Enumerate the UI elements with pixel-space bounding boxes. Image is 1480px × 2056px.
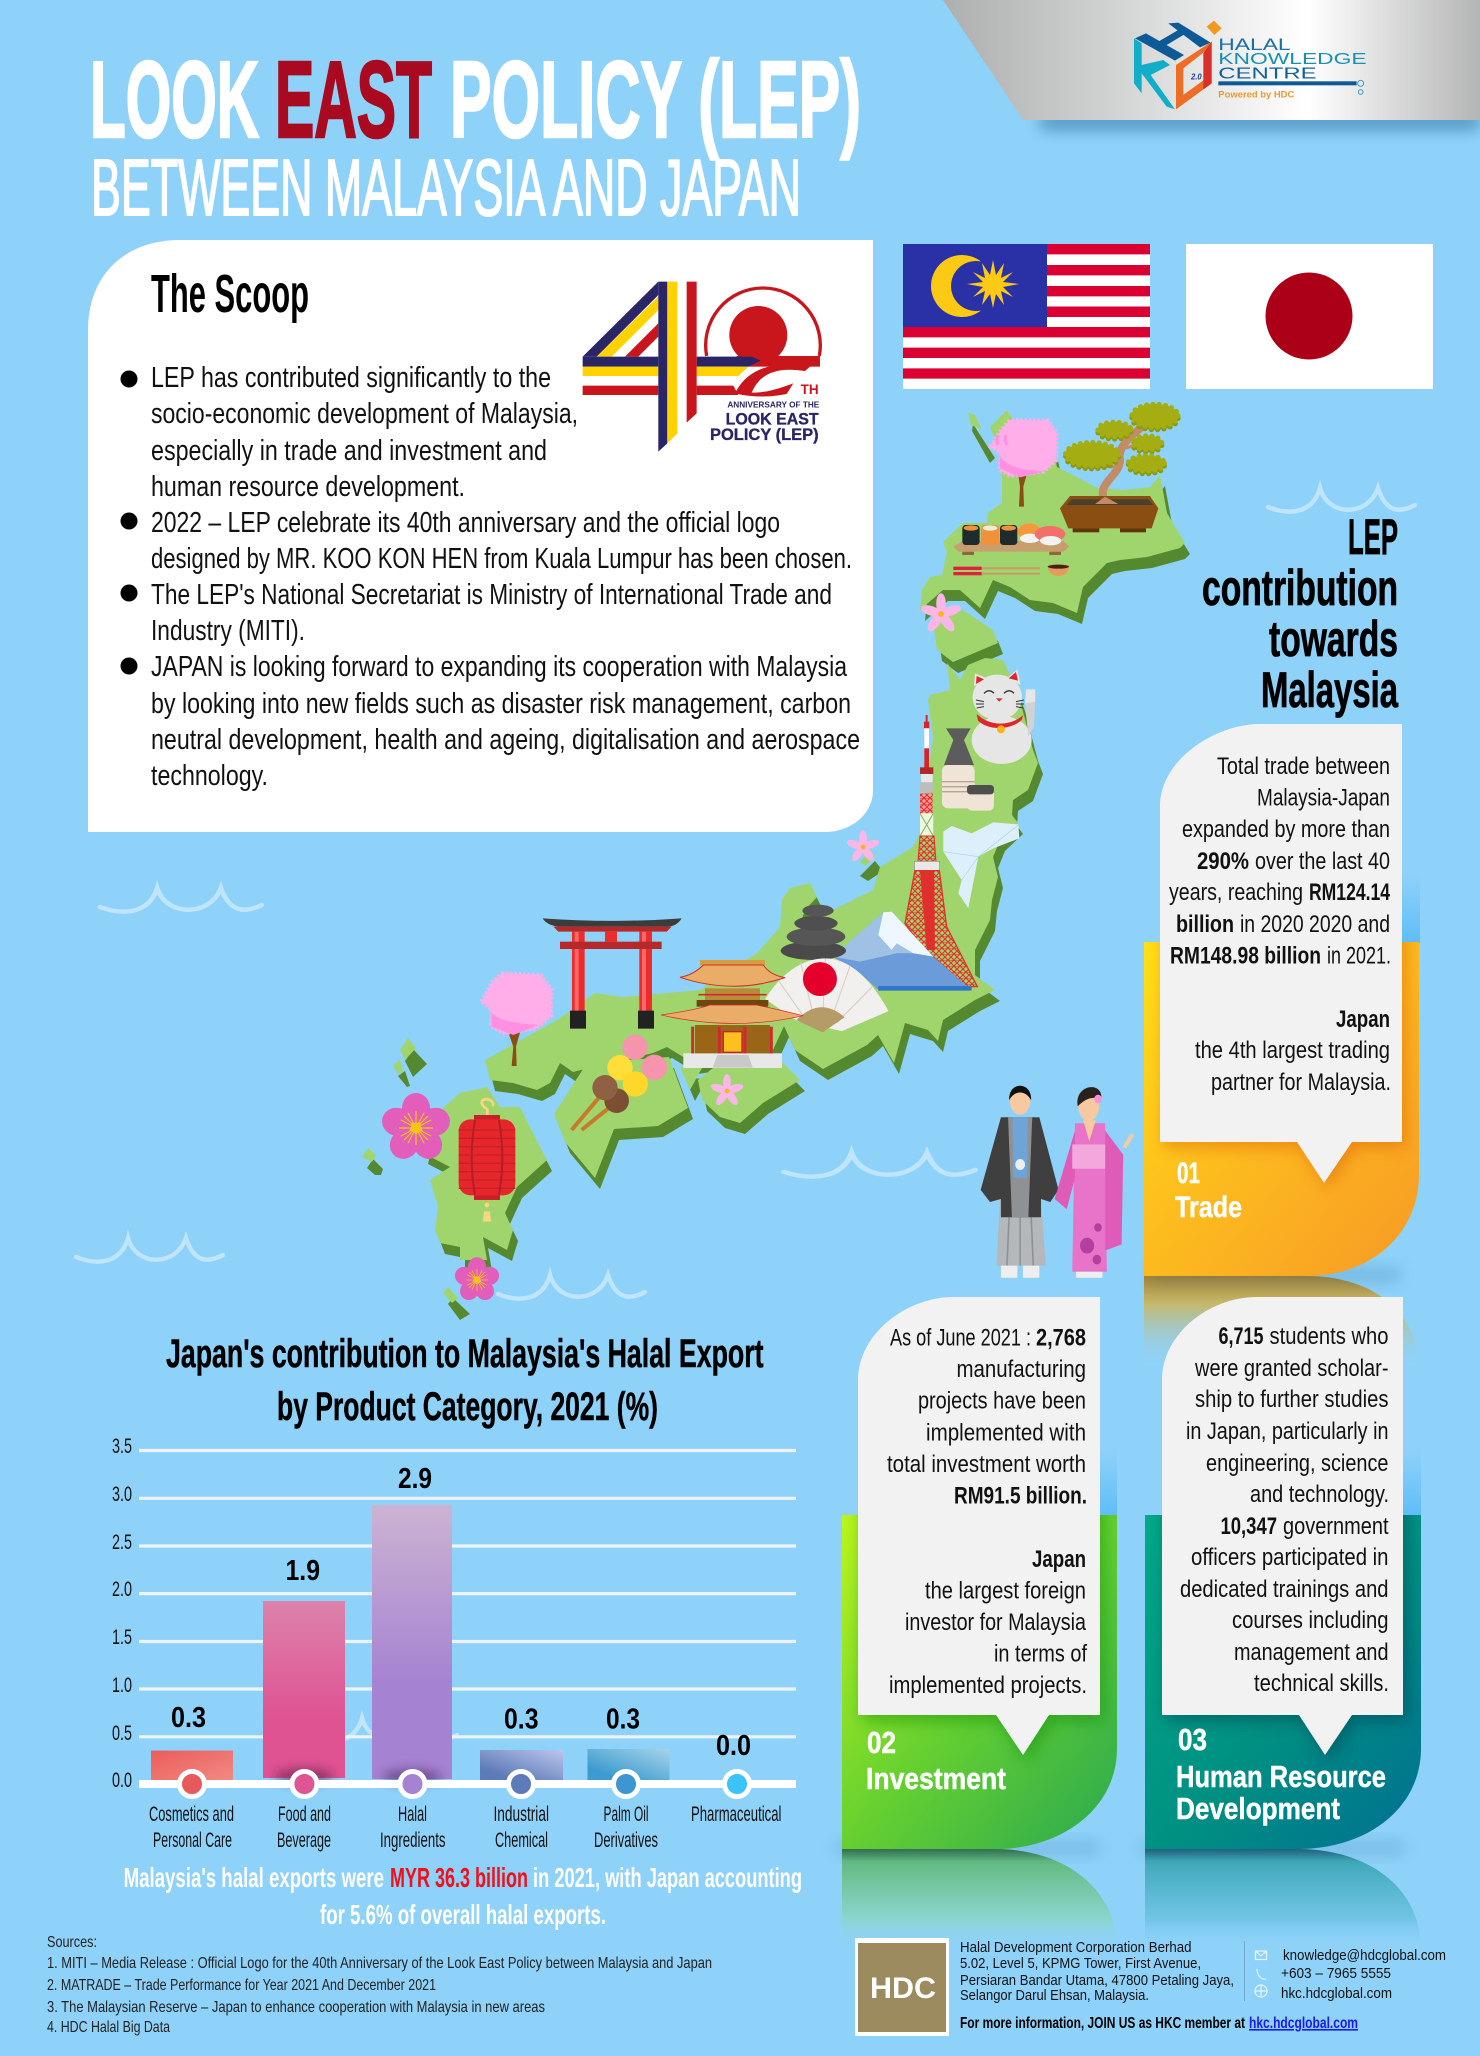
trade text: Total trade between — [1217, 753, 1390, 780]
heading: LEP contribution towards Malaysia: Malaysia — [1261, 662, 1399, 718]
y axis labels: 2.0 — [112, 1578, 132, 1601]
contact icons — [1255, 1951, 1267, 1997]
flag: Japan — [1186, 244, 1433, 389]
trade text: in 2020 2020 and — [1240, 911, 1390, 938]
human resource text — [1180, 1323, 1389, 1697]
logo: Halal Knowledge Centre — [1134, 21, 1367, 109]
trade text: RM124.14 — [1309, 879, 1390, 906]
scoop body text: especially in trade and investment and — [151, 435, 547, 467]
human resource text: were granted scholar- — [1194, 1355, 1388, 1382]
cherry blossom tree, west — [482, 973, 552, 1066]
logo: HDC: HDC — [870, 1972, 936, 2005]
bar value labels: 0.0 — [716, 1730, 751, 1762]
investment text: implemented with — [926, 1420, 1086, 1446]
human resource text: and technology. — [1250, 1481, 1389, 1508]
logo: Halal Knowledge Centre: 2.0 — [1190, 72, 1202, 81]
card 03 reflection — [1145, 1849, 1421, 1950]
trade label: 01 — [1177, 1157, 1200, 1190]
map of Japan — [362, 404, 1190, 1320]
human resource text: management and — [1234, 1639, 1388, 1666]
bar value labels: 2.9 — [398, 1463, 432, 1495]
heading: LEP contribution towards Malaysia: LEP — [1348, 509, 1398, 565]
y axis labels: 1.0 — [112, 1674, 132, 1697]
scoop body text: technology. — [151, 760, 268, 792]
membership call to action: hkc.hdcglobal.com — [1249, 2015, 1358, 2032]
logo: 40th anniversary LEP: ANNIVERSARY OF THE — [727, 400, 820, 410]
panel: 01 Trade — [1144, 724, 1420, 1282]
Tokyo tower — [905, 715, 977, 987]
chart title — [166, 1332, 764, 1429]
bullet markers — [120, 370, 138, 674]
investment text: total investment worth — [887, 1451, 1086, 1478]
stacked stones — [781, 905, 846, 960]
chart grid lines — [139, 1450, 796, 1737]
bar value labels — [171, 1463, 751, 1762]
logo: 40th anniversary LEP: TH — [801, 381, 819, 397]
category labels: Pharmaceutical — [691, 1803, 781, 1826]
membership call to action: For more information, JOIN US as HKC member at — [960, 2015, 1246, 2032]
chart title: by Product Category, 2021 (%) — [277, 1385, 658, 1429]
decorative waves — [76, 488, 1415, 1742]
logo: 40th anniversary LEP: LOOK EAST — [726, 409, 819, 428]
investment label: Investment — [866, 1761, 1006, 1796]
scoop body text: neutral development, health and ageing, digitalisation and aerospace — [151, 724, 860, 756]
y axis labels: 3.0 — [112, 1483, 132, 1506]
panel: The Scoop — [88, 240, 873, 832]
cherry flowers — [378, 593, 962, 1304]
logo: Halal Knowledge Centre: Powered by HDC — [1218, 89, 1295, 99]
halal exports note — [124, 1862, 802, 1930]
bar value labels: 0.3 — [606, 1704, 640, 1736]
logo: 40th anniversary LEP — [583, 282, 820, 452]
investment text: Japan — [1032, 1546, 1086, 1573]
halal exports note: Malaysia's halal exports were — [124, 1862, 384, 1893]
pagoda temple — [661, 960, 803, 1068]
sources: 1. MITI – Media Release : Official Logo for the 40th Anniversary of the Look East Policy between Malaysia and Japan — [47, 1955, 712, 1972]
contact address: Selangor Darul Ehsan, Malaysia. — [960, 1987, 1149, 2004]
paper lantern — [459, 1099, 515, 1222]
trade text: years, reaching — [1169, 879, 1303, 906]
logo: 40th anniversary LEP: POLICY (LEP) — [710, 425, 819, 444]
trade text — [1169, 753, 1391, 1096]
title: LOOK — [90, 39, 259, 161]
category labels: Industrial — [494, 1803, 549, 1826]
heading: The Scoop: The Scoop — [151, 264, 309, 324]
trade label: Trade — [1175, 1191, 1242, 1224]
x axis — [139, 1780, 796, 1788]
panel: 03 Human Resource Development — [1140, 1297, 1421, 1854]
contact details: knowledge@hdcglobal.com — [1283, 1947, 1446, 1964]
human resource text: 6,715 — [1218, 1323, 1264, 1350]
human resource label — [1176, 1722, 1386, 1826]
map land shadows — [367, 421, 1190, 1320]
chart title: Japan's contribution to Malaysia's Halal Export — [166, 1332, 764, 1376]
human resource text: in Japan, particularly in — [1186, 1418, 1388, 1445]
people in kimono — [981, 1086, 1133, 1278]
investment text: in terms of — [994, 1640, 1087, 1667]
sources: 3. The Malaysian Reserve – Japan to enhance cooperation with Malaysia in new areas — [47, 1999, 545, 2016]
trade text: over the last 40 — [1255, 848, 1390, 875]
sources: 2. MATRADE – Trade Performance for Year 2021 And December 2021 — [47, 1977, 436, 1994]
human resource text: engineering, science — [1206, 1450, 1388, 1477]
title — [90, 39, 861, 232]
silver header banner — [943, 0, 1480, 120]
scoop body text — [151, 362, 860, 792]
trade label — [1175, 1157, 1242, 1224]
y axis labels — [112, 1435, 132, 1792]
contact details — [1281, 1947, 1446, 2002]
investment text: As of June 2021 : — [890, 1324, 1031, 1352]
investment text: investor for Malaysia — [905, 1609, 1087, 1636]
scoop body text: The LEP's National Secretariat is Ministry of International Trade and — [151, 579, 832, 611]
trade text: in 2021. — [1327, 942, 1391, 970]
human resource label: Development — [1176, 1791, 1340, 1826]
y axis labels: 2.5 — [112, 1531, 132, 1554]
investment text: projects have been — [918, 1388, 1086, 1414]
y axis labels: 3.5 — [112, 1435, 132, 1458]
scoop body text: 2022 – LEP celebrate its 40th anniversary and the official logo — [151, 507, 780, 539]
halal exports note: in 2021, with Japan accounting — [533, 1862, 802, 1893]
dango skewers — [572, 1035, 667, 1130]
header shadow — [1040, 112, 1480, 130]
scoop body text: Industry (MITI). — [151, 615, 305, 647]
investment text — [887, 1324, 1087, 1699]
y axis labels: 0.5 — [112, 1722, 132, 1745]
halal exports note: for 5.6% of overall halal exports. — [320, 1899, 606, 1930]
investment text: implemented projects. — [889, 1672, 1087, 1699]
sake bottle and cup — [942, 728, 994, 811]
sources — [47, 1934, 712, 2036]
trade text: Malaysia-Japan — [1257, 784, 1390, 812]
contact address: 5.02, Level 5, KPMG Tower, First Avenue, — [960, 1955, 1201, 1972]
trade text: RM148.98 billion — [1170, 942, 1321, 970]
bar value labels: 0.3 — [171, 1702, 206, 1734]
human resource text: courses including — [1232, 1607, 1388, 1634]
human resource label: Human Resource — [1176, 1759, 1386, 1794]
human resource text: ship to further studies — [1195, 1386, 1388, 1413]
scoop body text: by looking into new fields such as disaster risk management, carbon — [151, 688, 851, 720]
y axis labels: 1.5 — [112, 1626, 132, 1649]
logo: HDC — [855, 1938, 949, 2036]
sources: 4. HDC Halal Big Data — [47, 2019, 170, 2036]
axis markers — [180, 1772, 750, 1796]
hand fan — [765, 958, 889, 1032]
bars — [151, 1505, 670, 1785]
Mount Fuji — [833, 912, 972, 991]
card 02 reflection — [842, 1849, 1117, 1950]
heading: LEP contribution towards Malaysia: towards — [1269, 611, 1398, 667]
logo: Halal Knowledge Centre: HALAL — [1218, 35, 1291, 54]
halal exports note: MYR 36.3 billion — [390, 1862, 528, 1893]
investment text: manufacturing — [956, 1356, 1086, 1383]
trade text: the 4th largest trading — [1195, 1037, 1390, 1064]
investment label: 02 — [867, 1725, 896, 1760]
contact address: Persiaran Bandar Utama, 47800 Petaling Jaya, — [960, 1972, 1234, 1989]
trade text: expanded by more than — [1182, 816, 1390, 843]
human resource text: officers participated in — [1191, 1544, 1388, 1571]
woman in pink kimono — [1055, 1087, 1133, 1278]
title: BETWEEN MALAYSIA AND JAPAN — [91, 143, 801, 232]
human resource text: government — [1283, 1513, 1389, 1540]
human resource text: students who — [1270, 1323, 1388, 1350]
y axis labels: 0.0 — [112, 1769, 132, 1792]
investment text: 2,768 — [1036, 1324, 1086, 1352]
flag: Malaysia — [903, 244, 1150, 389]
category labels: Food and — [278, 1803, 331, 1826]
trade text: Japan — [1336, 1006, 1390, 1033]
contact details: +603 – 7965 5555 — [1281, 1965, 1391, 1982]
scoop body text: JAPAN is looking forward to expanding its cooperation with Malaysia — [151, 651, 848, 683]
investment label — [866, 1725, 1006, 1796]
investment text: the largest foreign — [925, 1577, 1086, 1604]
contact details: hkc.hdcglobal.com — [1281, 1985, 1392, 2002]
category labels — [149, 1803, 781, 1852]
logo: Halal Knowledge Centre: KNOWLEDGE — [1218, 51, 1367, 68]
contact address — [960, 1939, 1234, 2004]
category labels: Cosmetics and — [149, 1803, 234, 1826]
category labels: Derivatives — [594, 1829, 658, 1852]
card 01 reflection — [1144, 1276, 1419, 1370]
human resource label: 03 — [1178, 1722, 1207, 1757]
logo: Halal Knowledge Centre: CENTRE — [1218, 65, 1317, 82]
torii gate — [543, 918, 682, 1029]
sushi platter and chopsticks — [953, 523, 1069, 576]
sources: Sources: — [47, 1934, 97, 1951]
contact address: Halal Development Corporation Berhad — [960, 1939, 1192, 1956]
category labels: Chemical — [495, 1829, 548, 1852]
map land — [362, 410, 1185, 1303]
bar value labels: 0.3 — [504, 1704, 538, 1736]
lucky cat — [972, 669, 1035, 764]
title: EAST — [275, 39, 432, 161]
category labels: Personal Care — [153, 1829, 232, 1852]
title: POLICY (LEP) — [450, 39, 861, 161]
bar value labels: 1.9 — [286, 1555, 320, 1587]
trade text: billion — [1176, 911, 1234, 938]
bonsai tree in pot — [1060, 404, 1178, 532]
bar chart — [112, 1435, 796, 1852]
panel: 02 Investment — [835, 1297, 1117, 1854]
scoop body text: human resource development. — [151, 471, 465, 503]
heading: LEP contribution towards Malaysia — [1202, 509, 1399, 718]
man in hakama — [981, 1086, 1059, 1278]
category labels: Palm Oil — [604, 1803, 648, 1826]
trade text: partner for Malaysia. — [1211, 1069, 1391, 1096]
scoop body text: designed by MR. KOO KON HEN from Kuala Lumpur has been chosen. — [151, 543, 852, 575]
category labels: Ingredients — [380, 1829, 446, 1852]
human resource text: technical skills. — [1254, 1670, 1389, 1697]
category labels: Halal — [398, 1803, 427, 1826]
scoop body text: socio-economic development of Malaysia, — [151, 398, 578, 430]
human resource text: dedicated trainings and — [1180, 1576, 1388, 1603]
scoop body text: LEP has contributed significantly to the — [151, 362, 551, 394]
trade text: 290% — [1197, 848, 1249, 875]
category labels: Beverage — [277, 1829, 331, 1852]
origami crane — [943, 822, 1019, 908]
cherry blossom tree, north — [991, 420, 1057, 507]
human resource text: 10,347 — [1220, 1513, 1277, 1540]
investment text: RM91.5 billion. — [954, 1482, 1087, 1510]
